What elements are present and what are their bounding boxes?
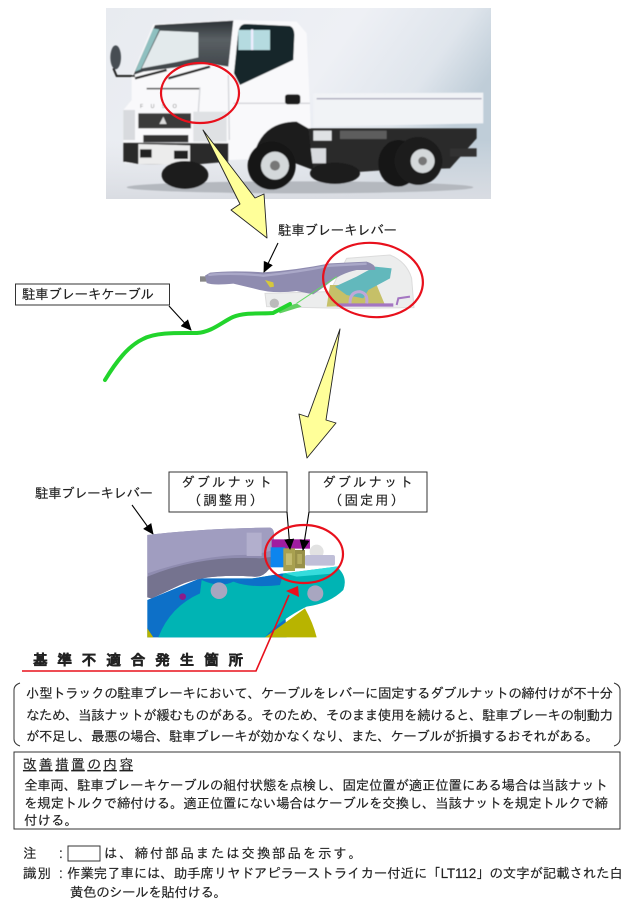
panel: remedy: 改善措置の内容 [23,757,133,772]
label box: double nut adjusting: ダブルナット [181,475,272,490]
red ellipse on nuts [265,525,343,583]
label box: double nut fixing: ダブルナット [322,475,413,490]
note: は、締付部品または交換部品を示す。 [104,846,362,861]
identification note [23,866,623,900]
yellow arrow from lever to detail [299,329,340,458]
identification note: 作業完了車には、助手席リヤドアピラーストライカー付近に「LT112」の文字が記載された白 [67,866,623,881]
panel: remedy: 全車両、駐車ブレーキケーブルの組付状態を点検し、固定位置が適正位置にある場合は当該ナット [24,778,608,793]
panel: defect description: 小型トラックの駐車ブレーキにおいて、ケーブルをレバーに固定するダブルナットの締付けが不十分 [26,686,613,701]
lever close-up diagram [147,528,345,637]
note: : [59,846,63,861]
label box: double nut fixing [309,472,427,512]
identification note: : [59,866,63,881]
label box: double nut adjusting: （調整用） [188,493,263,508]
label box: double nut fixing: （固定用） [329,493,404,508]
label box: parking brake cable [16,284,170,305]
label box: parking brake cable: 駐車ブレーキケーブル [22,287,154,302]
panel: remedy: を規定トルクで締付ける。適正位置にない場合はケーブルを交換し、当該ナットを規定トルクで締 [24,796,608,811]
arrow to adjusting nut [287,512,290,549]
parking brake lever assembly [200,255,414,313]
panel: remedy [14,752,620,829]
arrow to lever detail [132,505,153,534]
identification note: 黄色のシールを貼付ける。 [70,885,227,900]
arrow to lever [264,243,278,272]
panel: defect description: なため、当該ナットが緩むものがある。そのため、そのまま使用を続けると、駐車ブレーキの制動力 [26,708,613,723]
panel: remedy: 付ける。 [24,813,78,828]
photo: white Fuso truck: FUSO [140,104,184,110]
photo: white Fuso truck [106,8,491,199]
label: parking brake lever top: 駐車ブレーキレバー [278,223,397,238]
panel: defect description [14,683,620,746]
arrow to cable [169,306,191,330]
yellow arrow from truck to lever [203,130,267,238]
label box: double nut adjusting [169,472,287,512]
callout: non-conformity location: 基準不適合発生箇所 [33,652,244,669]
label: parking brake lever lower: 駐車ブレーキレバー [35,486,153,501]
identification note: 識別 [23,866,51,881]
green cable [105,304,290,380]
arrow to fixing nut [303,512,309,550]
red ellipse on truck [161,63,239,123]
red ellipse on lever [319,238,427,322]
panel: defect description: が不足し、最悪の場合、駐車ブレーキが効かなくなり、また、ケーブルが折損するおそれがある。 [26,729,599,744]
note: 注 [23,846,36,861]
red callout line and arrowhead [22,586,299,671]
